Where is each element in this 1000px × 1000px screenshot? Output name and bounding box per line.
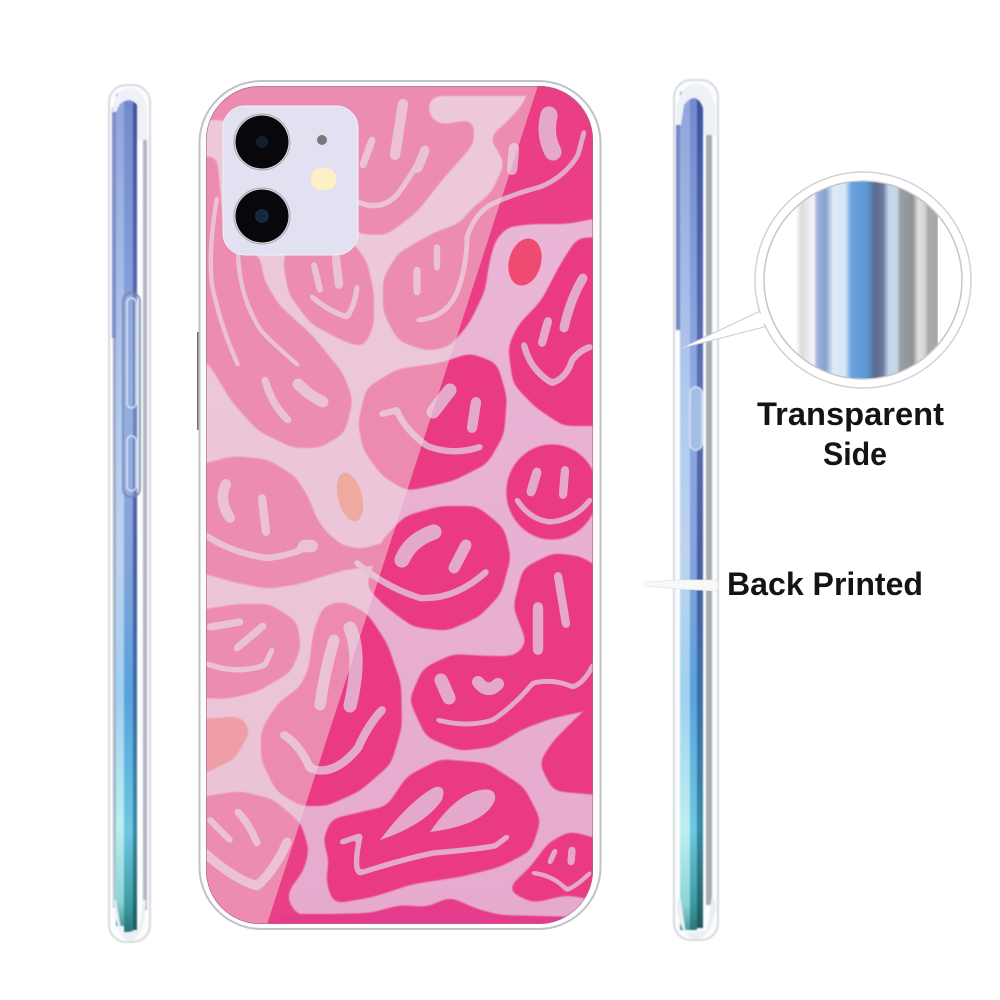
label: back printed: Back Printed [727, 566, 923, 602]
left side body [109, 85, 150, 942]
melting smiley: right squiggle [410, 553, 592, 796]
microphone [317, 135, 327, 145]
light reflection over left of the print [190, 70, 543, 940]
salmon blob: lower left edge [206, 716, 248, 773]
callout: transparent side magnifier [682, 172, 971, 388]
printed back [206, 86, 593, 924]
melting smiley: centre [358, 353, 507, 491]
right side button [690, 387, 702, 450]
orange oval spot [336, 472, 364, 522]
camera module [223, 106, 358, 255]
magnified stripes [797, 182, 938, 378]
right side view of phone case [674, 80, 718, 940]
melting smiley: top centre [210, 86, 559, 236]
magnifier ring [755, 172, 971, 388]
right side body [674, 80, 718, 940]
bottom wave of print [298, 898, 567, 924]
flash [311, 168, 336, 190]
melting smiley: bottom right small [511, 832, 593, 902]
camera island [223, 106, 358, 255]
lower lens [234, 188, 290, 244]
melting smiley: bottom centre [323, 759, 541, 904]
side buttons of back view [197, 270, 601, 480]
red oval spot [508, 238, 542, 286]
transparent bezel [200, 81, 600, 929]
pink background [200, 80, 600, 930]
melting smiley: lower left [206, 604, 300, 700]
melting smiley: under camera [284, 238, 374, 348]
label: transparent side: Transparent [757, 396, 944, 432]
label: transparent side [757, 396, 944, 472]
melting smiley: right [508, 236, 592, 427]
inner edge line [206, 86, 593, 924]
callout bar: back printed [645, 580, 718, 591]
left side volume buttons [123, 293, 140, 497]
melting smiley: lower centre [357, 506, 511, 631]
upper lens [234, 114, 290, 170]
label: transparent side: Side [823, 436, 887, 472]
left side view of phone case [109, 85, 150, 942]
melting smiley: large centre teardrop [261, 601, 402, 806]
melting smiley: left long [206, 156, 352, 448]
pointer wedge [682, 311, 768, 348]
melting smiley: right middle [506, 444, 598, 540]
phone case back view [198, 80, 602, 930]
melting smiley: bottom left [206, 791, 308, 924]
melting smiley: left middle [206, 456, 382, 589]
melting smiley: top right long drip [382, 86, 593, 350]
